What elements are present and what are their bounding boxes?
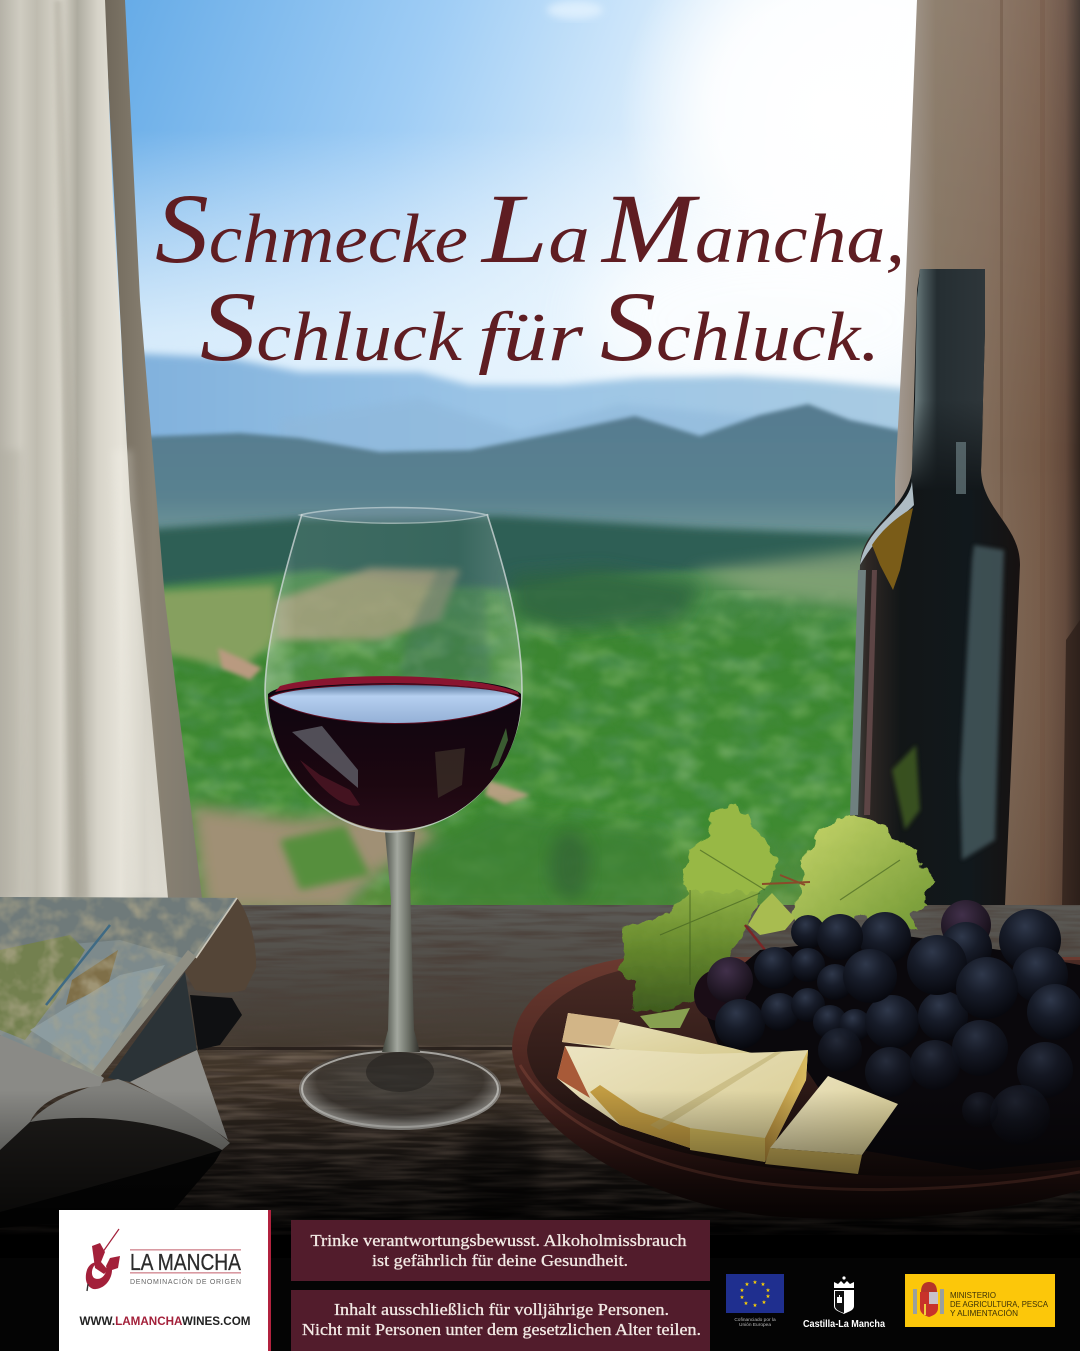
left leaf lower half bbox=[618, 890, 760, 1012]
logo: European Union: ★ bbox=[753, 1280, 758, 1286]
wordmark: DENOMINACIÓN DE ORIGEN bbox=[130, 1277, 241, 1286]
logo: European Union: Cofinanciado por la bbox=[734, 1317, 776, 1323]
logo: Ministerio: Y ALIMENTACIÓN bbox=[950, 1308, 1018, 1318]
pale fields and bare slopes bbox=[150, 585, 275, 670]
logo: European Union: ★ bbox=[761, 1282, 766, 1288]
wordmark bbox=[130, 1249, 242, 1286]
dark tree line bbox=[110, 516, 880, 590]
vineyard field bbox=[164, 564, 858, 905]
left leaf top half bbox=[682, 803, 777, 900]
notice: adults only bbox=[291, 1290, 710, 1351]
title: für bbox=[478, 299, 584, 376]
wine bbox=[268, 676, 521, 830]
terracotta plate bbox=[512, 957, 1080, 1219]
map sheet bbox=[0, 895, 240, 1080]
right window frame: wooden shutter bbox=[895, 0, 1080, 910]
logo: Ministerio: MINISTERIO bbox=[950, 1291, 996, 1300]
notice: responsible drinking bbox=[291, 1220, 710, 1281]
cloth shadow bbox=[0, 1150, 222, 1228]
logo: European Union: ★ bbox=[766, 1288, 771, 1294]
glass stem bbox=[382, 832, 420, 1052]
logo: European Union bbox=[726, 1274, 784, 1328]
fold interior bbox=[185, 898, 256, 993]
plate outer body bbox=[512, 957, 1080, 1219]
logo: European Union: ★ bbox=[766, 1294, 771, 1300]
background scene: window view over vineyards bbox=[108, 0, 917, 905]
title: Schluck bbox=[200, 271, 464, 382]
logo: European Union: Unión Europea bbox=[739, 1322, 771, 1328]
bunch shadow bbox=[700, 935, 1080, 1170]
logo: Ministerio bbox=[905, 1274, 1055, 1327]
main wedge bbox=[557, 1046, 808, 1162]
back wedge bbox=[562, 1013, 752, 1060]
icon: Spanish coat of arms bbox=[913, 1282, 944, 1317]
logo: European Union: ★ bbox=[744, 1301, 749, 1307]
shaded cloth flap bbox=[108, 972, 197, 1082]
right leaf bbox=[790, 812, 935, 930]
front wedge bbox=[770, 1076, 898, 1155]
left curtain bbox=[0, 0, 202, 898]
icon: Don Quixote on horse bbox=[86, 1229, 120, 1291]
notice: responsible drinking: ist gefährlich für deine Gesundheit. bbox=[372, 1251, 628, 1270]
wordmark: LA MANCHA bbox=[130, 1249, 242, 1275]
notice: adults only: Nicht mit Personen unter dem gesetzlichen Alter teilen. bbox=[302, 1320, 701, 1339]
wooden table bbox=[0, 905, 1080, 1235]
logo: European Union: ★ bbox=[753, 1303, 758, 1309]
website: WWW.LAMANCHAWINES.COM bbox=[80, 1316, 250, 1328]
logo: European Union: ★ bbox=[745, 1282, 750, 1288]
wine bottle bbox=[850, 269, 1020, 905]
logo panel: La Mancha bbox=[59, 1210, 271, 1351]
logo: European Union: ★ bbox=[762, 1300, 767, 1306]
lower cloth fold bbox=[0, 1035, 104, 1150]
lit cloth flap bbox=[130, 1050, 228, 1140]
distant mountains bbox=[122, 348, 900, 454]
cheese wedges bbox=[557, 1013, 898, 1174]
logo: European Union: ★ bbox=[740, 1295, 745, 1301]
dark inner fold bbox=[0, 1117, 222, 1212]
logo: European Union: ★ bbox=[740, 1288, 745, 1294]
notice: responsible drinking: Trinke verantwortungsbewusst. Alkoholmissbrauch bbox=[310, 1231, 686, 1250]
title: Schluck. bbox=[600, 271, 880, 382]
wine glass bbox=[265, 507, 522, 1130]
near mountains bbox=[126, 402, 898, 540]
title: Schmecke bbox=[155, 173, 468, 284]
glass foot bbox=[299, 1048, 501, 1130]
title: Mancha, bbox=[600, 173, 905, 284]
small centre leaf bbox=[748, 893, 795, 935]
title bbox=[155, 173, 905, 382]
sky bbox=[108, 0, 917, 390]
folded cloth and map bbox=[0, 895, 256, 1228]
vine leaves bbox=[618, 803, 935, 1028]
bottom fade to black bbox=[0, 1090, 1080, 1260]
plate inner bowl bbox=[527, 960, 1080, 1177]
logo: Castilla-La Mancha: Castilla-La Mancha bbox=[803, 1319, 885, 1330]
title: La bbox=[480, 173, 590, 284]
logo: Castilla-La Mancha bbox=[803, 1276, 885, 1330]
notice: adults only: Inhalt ausschließlich für volljährige Personen. bbox=[334, 1300, 669, 1319]
glass bowl bbox=[265, 507, 522, 832]
logo: Ministerio: DE AGRICULTURA, PESCA bbox=[950, 1300, 1049, 1309]
grape bunch bbox=[694, 900, 1080, 1170]
